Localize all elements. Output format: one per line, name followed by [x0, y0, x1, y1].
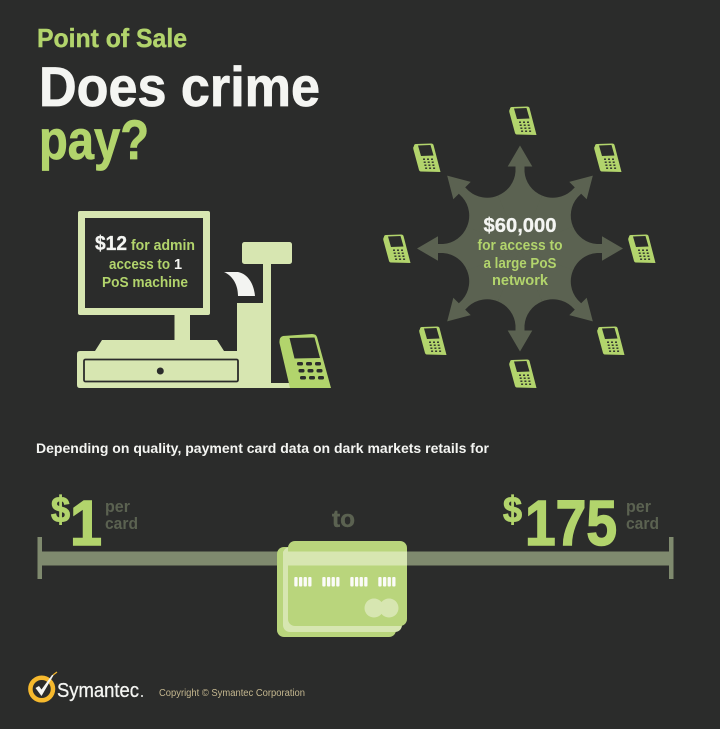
- subtitle: Point of Sale: Point of Sale: [37, 23, 187, 53]
- price: $1 per card: per: [105, 498, 131, 516]
- price: $1 per card: card: [105, 515, 138, 533]
- price: $175 per card: $: [503, 489, 522, 530]
- register body and drawer: [77, 264, 292, 388]
- icon: credit cards: [277, 541, 407, 637]
- card brand circles: [364, 598, 398, 618]
- card terminal: [279, 334, 331, 388]
- customer display: [242, 242, 292, 264]
- copyright: Copyright © Symantec Corporation: [159, 688, 305, 699]
- icon: terminal left: [383, 234, 410, 263]
- title: Does crime pay?: Does crime: [39, 55, 320, 118]
- monitor text: $12 for admin access to 1 PoS machine: access to: [109, 257, 170, 273]
- price: $175 per card: [503, 487, 659, 559]
- heading: card data retail price: Depending on quality, payment card data on dark markets retails for: [36, 440, 490, 456]
- monitor text: $12 for admin access to 1 PoS machine: PoS machine: [102, 275, 188, 291]
- icon: terminal upper left: [413, 144, 440, 172]
- price range bar: [38, 537, 674, 579]
- receipt: [224, 272, 255, 296]
- network text: $60,000 for access to a large PoS network: a large PoS: [484, 256, 557, 272]
- network text: $60,000 for access to a large PoS network: network: [492, 273, 549, 289]
- title: Does crime pay?: [39, 55, 320, 171]
- network text: $60,000 for access to a large PoS network: [478, 215, 563, 289]
- logo: Symantec: [30, 672, 143, 702]
- price: $175 per card: 175: [525, 487, 617, 559]
- title: Does crime pay?: pay?: [39, 108, 149, 171]
- monitor text: $12 for admin access to 1 PoS machine: 1: [174, 257, 182, 273]
- icon: terminal top: [509, 106, 536, 135]
- icon: terminal lower right: [597, 326, 624, 355]
- network text: $60,000 for access to a large PoS network: for access to: [478, 238, 563, 254]
- icon: terminal bottom: [509, 360, 536, 388]
- monitor text: $12 for admin access to 1 PoS machine: $12: [95, 233, 127, 255]
- network text: $60,000 for access to a large PoS network: $60,000: [484, 215, 556, 237]
- monitor: [78, 211, 210, 341]
- price: $1 per card: $: [51, 489, 70, 530]
- logo: Symantec: Symantec: [57, 680, 139, 702]
- price: $175 per card: per: [626, 498, 652, 516]
- monitor text: $12 for admin access to 1 PoS machine: [95, 233, 195, 291]
- label: to: to: [332, 506, 355, 533]
- network star with eight arrows: [417, 146, 623, 352]
- illustration: point of sale machine: [77, 211, 331, 388]
- price: $1 per card: [51, 487, 138, 559]
- price: $1 per card: 1: [70, 487, 102, 559]
- icon: terminal right: [628, 234, 656, 263]
- card number: [294, 577, 396, 586]
- monitor text: $12 for admin access to 1 PoS machine: for admin: [131, 238, 195, 254]
- price: $175 per card: card: [626, 515, 659, 533]
- icon: terminal upper right: [594, 144, 622, 172]
- icon: terminal lower left: [419, 326, 446, 355]
